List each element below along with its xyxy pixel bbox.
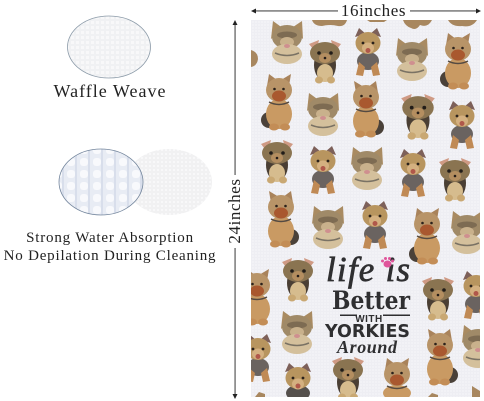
slogan line: YORKIES: YORKIES — [324, 321, 410, 342]
text: benefits: No Depilation During Cleaning — [4, 248, 216, 264]
text: benefits: Strong Water Absorption — [26, 230, 194, 246]
dog pattern — [239, 20, 484, 401]
slogan line: life is: life is — [326, 250, 410, 289]
panel: tea towel — [239, 20, 484, 401]
arrow: height dimension — [232, 20, 238, 399]
label: 16 inches: 16inches — [341, 1, 406, 20]
label: 24 inches: 24inches — [225, 178, 244, 244]
icon: pink paw — [381, 257, 394, 268]
towel fabric — [251, 20, 480, 397]
slogan line: Around: Around — [336, 337, 398, 357]
arrow: width dimension — [251, 8, 481, 14]
panel: waffle weave swatch — [68, 16, 150, 78]
slogan line: Better: Better — [332, 286, 411, 315]
slogan line: WITH: WITH — [355, 314, 383, 325]
panel: absorption swatches — [59, 149, 212, 215]
slogan — [324, 256, 410, 353]
heading: waffle weave: Waffle Weave — [54, 81, 166, 101]
